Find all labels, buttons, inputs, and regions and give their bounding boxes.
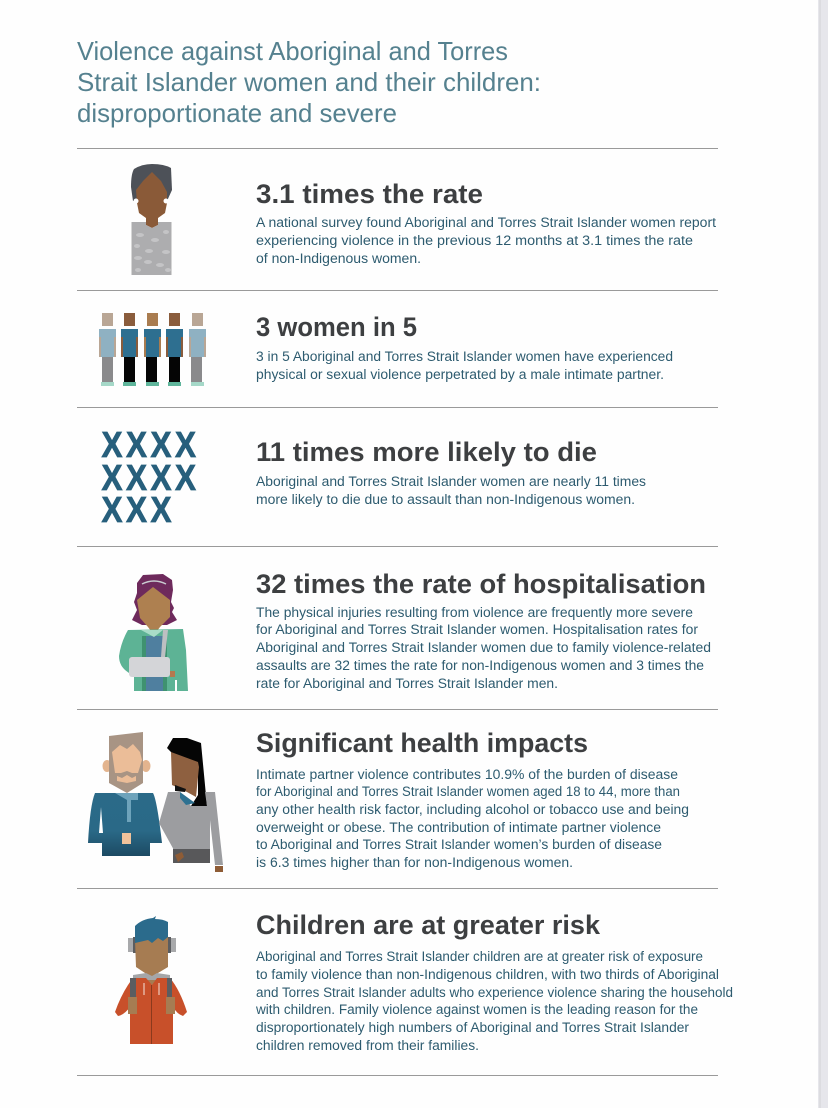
title: disproportionate and severe (77, 98, 397, 128)
text block: 11 times more likely to die: Aboriginal and Torres Strait Islander women are nearly 11 times (256, 474, 646, 489)
title (77, 36, 541, 128)
text block: Children are at greater risk (255, 910, 733, 1053)
text block: Significant health impacts: is 6.3 times higher than for non-Indigenous women. (256, 855, 573, 870)
icon: woman with earrings (131, 164, 172, 275)
text block: Significant health impacts: for Aboriginal and Torres Strait Islander women aged 18 to 44, more than (256, 784, 680, 799)
text block: 3 women in 5: 3 in 5 Aboriginal and Torres Strait Islander women have experienced (256, 349, 673, 364)
text block: 32 times the rate of hospitalisation (256, 569, 711, 691)
icon: five women, three highlighted (99, 313, 206, 386)
icon: rows of eleven X marks: XXXX (102, 425, 200, 466)
text block: Children are at greater risk: Aboriginal and Torres Strait Islander children are at greater risk of exposure (256, 949, 703, 964)
text block: Significant health impacts (256, 728, 689, 870)
text block: 11 times more likely to die: more likely to die due to assault than non-Indigenous women. (256, 492, 635, 507)
text block: 3.1 times the rate: A national survey found Aboriginal and Torres Strait Islander women report (256, 215, 716, 230)
icon: rows of eleven X marks (102, 425, 200, 531)
text block: Significant health impacts: overweight or obese. The contribution of intimate partner violence (256, 820, 661, 835)
text block: 11 times more likely to die: 11 times more likely to die (256, 437, 597, 467)
text block: Children are at greater risk: and Torres Strait Islander adults who experience violence sharing the household (256, 985, 733, 1000)
text block: 11 times more likely to die (256, 437, 646, 507)
text block: Children are at greater risk: with children. Family violence against women is the leading reason for the (255, 1002, 698, 1017)
text block: 32 times the rate of hospitalisation: The physical injuries resulting from violence are frequently more severe (256, 605, 693, 620)
text block: Significant health impacts: Intimate partner violence contributes 10.9% of the burden of disease (256, 767, 678, 782)
text block: Children are at greater risk: to family violence than non-Indigenous children, with two thirds of Aboriginal (256, 967, 719, 982)
icon: woman with arm in sling (119, 574, 188, 691)
text block: 3 women in 5 (256, 312, 673, 382)
icon: child with headphones and backpack (115, 916, 187, 1044)
icon: rows of eleven X marks: XXX (102, 490, 175, 531)
text block: 32 times the rate of hospitalisation: rate for Aboriginal and Torres Strait Islander men. (256, 676, 558, 691)
title: Violence against Aboriginal and Torres (77, 36, 508, 66)
text block: Children are at greater risk: children removed from their families. (256, 1038, 479, 1053)
text block: Significant health impacts: Significant health impacts (256, 728, 588, 758)
text block: Children are at greater risk: Children are at greater risk (256, 910, 600, 940)
text block: 32 times the rate of hospitalisation: for Aboriginal and Torres Strait Islander women. Hospitalisation rates for (256, 622, 699, 637)
text block: 3.1 times the rate: 3.1 times the rate (256, 179, 483, 209)
text block: 3.1 times the rate (256, 179, 716, 266)
text block: 3 women in 5: 3 women in 5 (256, 312, 417, 342)
icon: man and woman standing together (88, 732, 223, 872)
text block: 32 times the rate of hospitalisation: 32 times the rate of hospitalisation (256, 569, 706, 599)
text block: 3 women in 5: physical or sexual violence perpetrated by a male intimate partner. (256, 367, 664, 382)
icon: rows of eleven X marks: XXXX (102, 458, 200, 499)
text block: 32 times the rate of hospitalisation: Aboriginal and Torres Strait Islander women due to family violence-related (256, 640, 711, 655)
text block: 3.1 times the rate: experiencing violence in the previous 12 months at 3.1 times the rate (256, 233, 693, 248)
text block: Children are at greater risk: disproportionately high numbers of Aboriginal and Torres Strait Islander (256, 1020, 690, 1035)
title: Strait Islander women and their children: (77, 67, 541, 97)
text block: Significant health impacts: to Aboriginal and Torres Strait Islander women’s burden of disease (256, 837, 662, 852)
text block: 32 times the rate of hospitalisation: assaults are 32 times the rate for non-Indigenous women and 3 times the (256, 658, 704, 673)
text block: Significant health impacts: any other health risk factor, including alcohol or tobacco use and being (256, 802, 689, 817)
text block: 3.1 times the rate: of non-Indigenous women. (256, 251, 421, 266)
